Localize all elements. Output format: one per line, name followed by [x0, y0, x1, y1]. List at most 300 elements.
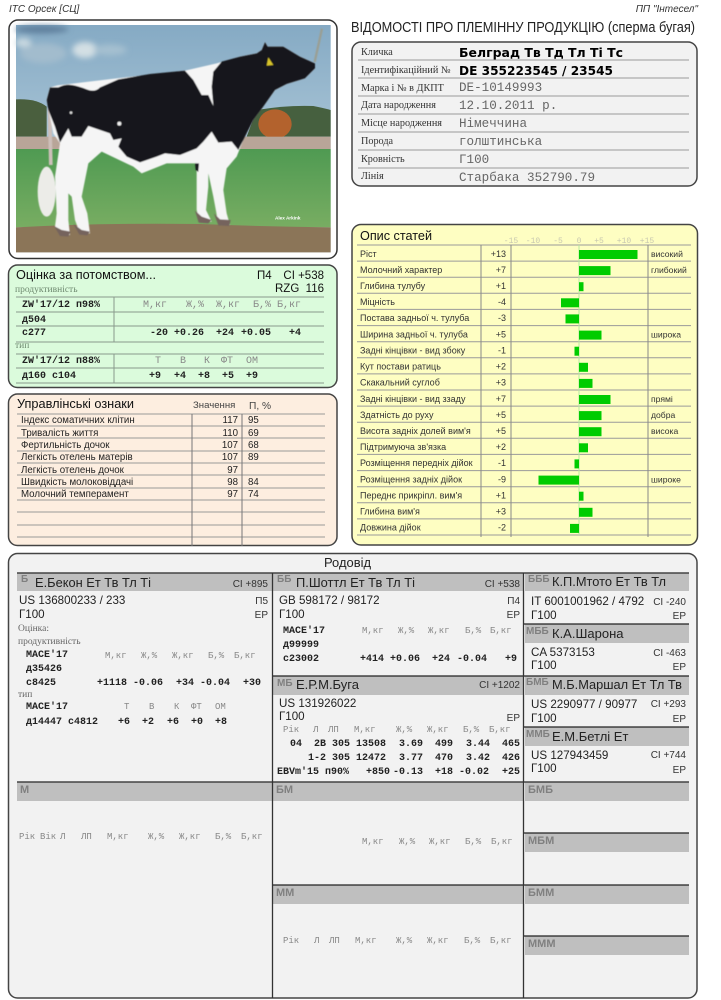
sire Б: ОМ [215, 702, 226, 712]
sire Б: +6 [118, 717, 130, 728]
ancestor ММБ: US 127943459 [531, 749, 608, 762]
ancestor ММБ [526, 729, 686, 776]
sire Б: Ж,кг [172, 651, 194, 661]
photographer credit: Alex Arkink [275, 215, 301, 220]
type table: +8 [198, 371, 210, 382]
sire Б: +8 [215, 717, 227, 728]
production table: Ж,% [186, 300, 204, 311]
granddam МБ: Г100 [279, 710, 305, 723]
traits table: 107 [222, 452, 238, 463]
ancestor МББ: МББ [526, 626, 549, 637]
trait names: Задні кінцівки - вид збоку [360, 346, 466, 356]
ancestor БББ [528, 574, 686, 622]
ancestor БМБ: М.Б.Маршал Ет Тл Тв [552, 677, 682, 692]
trait values: +5 [496, 426, 506, 436]
type table: ФТ [221, 356, 233, 367]
sire Б: д14447 с4812 [26, 717, 98, 728]
index values: CI +538 [283, 270, 324, 282]
ancestor МББ: ЕР [673, 662, 686, 673]
row: breed: голштинська [459, 135, 543, 149]
row: id number [361, 64, 613, 78]
ancestor ММ: ММ [276, 887, 294, 899]
sire Б: +6 [167, 717, 179, 728]
ancestor ММ: Рік [283, 936, 299, 946]
traits table: Індекс соматичних клітин [21, 415, 135, 426]
sire Б: -0.04 [200, 678, 230, 689]
ancestor МБМ empty: МБМ [528, 835, 554, 847]
granddam МБ: Рік [283, 725, 299, 735]
trait names: Підтримуюча зв'язка [360, 442, 446, 452]
trait names: Розміщення задніх дійок [360, 474, 462, 484]
granddam МБ: Ж,% [396, 725, 413, 735]
granddam МБ: Б,% [463, 725, 480, 735]
ancestor МББ: Г100 [531, 659, 557, 672]
granddam МБ: 04 [290, 739, 302, 750]
type table: +4 [174, 371, 186, 382]
granddam МБ: 3.69 [399, 739, 423, 750]
production table: Б,% [253, 300, 271, 311]
grandsire ББ: д99999 [283, 640, 319, 651]
traits table: Легкість отелень матерів [21, 452, 133, 463]
ancestor МББ: К.А.Шарона [552, 626, 624, 641]
trait names: Довжина дійок [360, 522, 421, 532]
column headers: Значення [193, 400, 235, 411]
granddam МБ: 499 [435, 739, 453, 750]
row: name: Белград Тв Тд Тл Ті Тс [459, 46, 623, 60]
sire Б: Б,% [208, 651, 225, 661]
panel: pedigree [8, 554, 697, 998]
ancestor БМ: Ж,кг [429, 837, 451, 847]
production table: +24 [216, 328, 234, 339]
granddam МБ: 3.42 [466, 753, 490, 764]
production table: д504 [22, 315, 46, 326]
granddam МБ: Е.Р.М.Буга [296, 677, 360, 692]
panel: identification data [352, 42, 697, 186]
trait values [491, 249, 506, 532]
column headers [193, 400, 271, 412]
trait values: -3 [498, 313, 506, 323]
trait names: Здатність до руху [360, 410, 434, 420]
granddam МБ: 12472 [356, 753, 386, 764]
trait values: -2 [498, 522, 506, 532]
sire Б: ФТ [191, 702, 202, 712]
trait names: Ріст [360, 249, 377, 259]
trait names: Молочний характер [360, 265, 442, 275]
production table: ZW'17/12 п98% [22, 299, 100, 311]
grandsire ББ: Б,% [465, 626, 482, 636]
traits table: 95 [248, 415, 259, 426]
panel: bull photo [9, 20, 337, 258]
sire Б: +34 [176, 678, 194, 689]
ancestor БММ empty: БММ [528, 887, 554, 899]
sire Б: -0.06 [133, 678, 163, 689]
column headers: П, % [249, 401, 271, 412]
row: line [361, 171, 595, 185]
sire Б: М,кг [105, 651, 127, 661]
type subheading: тип [15, 341, 29, 351]
ancestor ММ: Ж,кг [427, 936, 449, 946]
sire Б: П5 [255, 596, 268, 607]
grandsire ББ: ЕР [507, 610, 520, 621]
pedigree heading: Родовід [324, 555, 371, 570]
index values: RZG [275, 283, 299, 295]
ancestor БББ: БББ [528, 574, 550, 585]
ancestor БМ: Б,кг [491, 837, 513, 847]
granddam МБ: 13508 [356, 739, 386, 750]
grandsire ББ [277, 574, 520, 665]
heading: Оцінка за потомством... [16, 267, 156, 282]
grandsire ББ: MACE'17 [283, 625, 325, 637]
trait values: +13 [491, 249, 506, 259]
sire Б: продуктивність [18, 637, 81, 647]
trait names: Переднє прикріпл. вим'я [360, 490, 462, 500]
sire Б: ЕР [255, 610, 268, 621]
sire Б [18, 574, 268, 728]
traits table: Фертильність дочок [21, 440, 110, 451]
ancestor ММ: Л [313, 936, 319, 946]
type table: +5 [222, 371, 234, 382]
traits table: 117 [223, 415, 238, 426]
row: line: Лінія [361, 171, 384, 182]
traits table: Молочний темперамент [21, 489, 129, 500]
heading: Управлінські ознаки [17, 396, 134, 411]
row: id number: DE 355223545 / 23545 [459, 64, 613, 78]
trait names: Висота задніх долей вим'я [360, 426, 471, 436]
sire Б: MACE'17 [26, 649, 68, 661]
ancestor БББ: IT 6001001962 / 4792 [531, 595, 644, 608]
sire Б: тип [18, 690, 32, 700]
granddam МБ: М,кг [354, 725, 376, 735]
ancestor БМБ: CI +293 [651, 699, 686, 710]
sire Б: +30 [243, 678, 261, 689]
dam М: М,кг [107, 832, 129, 842]
trait values: +1 [496, 281, 506, 291]
row: blood: Г100 [459, 153, 489, 167]
ancestor МББ: CA 5373153 [531, 646, 595, 659]
dam М: Вік [40, 832, 56, 842]
traits table: 97 [227, 489, 238, 500]
granddam МБ: 3.77 [399, 753, 423, 764]
ancestor МББ: CI -463 [653, 648, 686, 659]
trait notes [651, 249, 687, 484]
sire Б: Б [21, 574, 28, 585]
sire Б: Ж,% [141, 651, 158, 661]
dam М: Ж,% [148, 832, 165, 842]
granddam МБ: 465 [502, 739, 520, 750]
type table: +9 [246, 371, 258, 382]
trait names: Глибина вим'я [360, 506, 420, 516]
header: left organisation: ІТС Орсек [СЦ] [9, 4, 80, 15]
grandsire ББ: Ж,кг [428, 626, 450, 636]
trait values: +7 [496, 265, 506, 275]
granddam МБ: CI +1202 [479, 680, 520, 691]
row: blood [361, 153, 489, 167]
ancestor ММ [276, 887, 512, 946]
granddam МБ: EBVm'15 п90% [277, 766, 349, 778]
type table: д160 с104 [22, 371, 76, 382]
row: line: Старбака 352790.79 [459, 171, 595, 185]
dam М: ЛП [80, 832, 92, 842]
production table [22, 299, 301, 339]
trait values: +2 [496, 362, 506, 372]
row: birth date [361, 99, 557, 113]
trait values: +3 [496, 506, 506, 516]
type table [22, 355, 258, 382]
trait names: Кут постави ратиць [360, 362, 441, 372]
production table: Ж,кг [216, 300, 240, 311]
type table: Т [155, 356, 161, 367]
traits table: 69 [248, 428, 259, 439]
ancestor БМ: БМ [276, 784, 293, 796]
bar chart [538, 250, 638, 533]
sire Б: В [149, 702, 155, 712]
trait notes: прямі [651, 394, 673, 404]
ancestor БМ: Ж,% [399, 837, 416, 847]
row: blood: Кровність [361, 154, 405, 165]
index values [257, 270, 324, 295]
row: breed [361, 135, 543, 149]
ancestor БМБ: ЕР [673, 714, 686, 725]
heading: Опис статей [360, 228, 432, 243]
traits table: 84 [248, 477, 259, 488]
grandsire ББ: -0.04 [457, 654, 487, 665]
ancestor ММБ: CI +744 [651, 750, 686, 761]
trait names: Глибина тулубу [360, 281, 426, 291]
sire Б: +1118 [97, 678, 127, 689]
trait names: Міцність [360, 297, 395, 307]
trait notes: високий [651, 249, 683, 259]
grandsire ББ: +24 [432, 654, 450, 665]
ancestor ММБ: ММБ [526, 729, 550, 740]
ancestor ММБ: Г100 [531, 762, 557, 775]
traits table: 97 [227, 465, 238, 476]
type table: ZW'17/12 п88% [22, 355, 100, 367]
panel: progeny evaluation [8, 265, 337, 388]
traits table: Швидкість молоковіддачі [21, 477, 133, 488]
ancestor БМБ [526, 677, 686, 725]
granddam МБ: ЕР [507, 713, 520, 724]
grandsire ББ: +9 [505, 654, 517, 665]
grandsire ББ: GB 598172 / 98172 [279, 594, 380, 607]
type table: К [204, 356, 210, 367]
grandsire ББ: с23002 [283, 654, 319, 665]
granddam МБ: 2В [314, 739, 326, 750]
ancestor ММ: Ж,% [396, 936, 413, 946]
row: mark [361, 81, 542, 95]
granddam МБ: 1-2 [308, 753, 326, 764]
traits table: Тривалість життя [21, 428, 98, 439]
granddam МБ: ЛП [327, 725, 339, 735]
header: right organisation: ПП "Інтесел" [636, 4, 698, 15]
dam М: Ж,кг [179, 832, 201, 842]
trait values: +7 [496, 394, 506, 404]
granddam МБ: US 131926022 [279, 697, 356, 710]
grandsire ББ: П4 [507, 596, 520, 607]
axis scale: +5 [594, 237, 604, 246]
grandsire ББ: Б,кг [490, 626, 512, 636]
traits table: 107 [222, 440, 238, 451]
row: name: Кличка [361, 47, 393, 58]
trait notes: добра [651, 410, 675, 420]
bull body [38, 29, 322, 237]
row: name [361, 46, 623, 60]
trait values: -9 [498, 474, 506, 484]
granddam МБ: Л [312, 725, 318, 735]
panel: management traits [8, 394, 337, 546]
row: birth place: Місце народження [361, 118, 442, 129]
ancestor ММБ: Е.М.Бетлі Ет [552, 729, 628, 744]
row: mark: DE-10149993 [459, 81, 542, 95]
dam М: Л [59, 832, 65, 842]
traits table: 89 [248, 452, 259, 463]
ancestor ММ: Б,% [464, 936, 481, 946]
ancestor БМ [276, 784, 513, 847]
granddam МБ: +18 [435, 767, 453, 778]
trait notes: висока [651, 426, 678, 436]
ancestor БББ: Г100 [531, 609, 557, 622]
sire Б: US 136800233 / 233 [19, 594, 125, 607]
ancestor БМБ: БМБ [526, 677, 549, 688]
row: breed: Порода [361, 136, 394, 147]
sire Б: MACE'17 [26, 701, 68, 713]
traits table: Легкість отелень дочок [21, 465, 125, 476]
trait values: +5 [496, 330, 506, 340]
pedigree header bars [17, 573, 689, 955]
grandsire ББ: М,кг [362, 626, 384, 636]
axis scale [504, 237, 654, 246]
axis scale: -15 [504, 237, 518, 246]
row: birth place: Німеччина [459, 117, 527, 131]
production table: +0.05 [241, 328, 271, 339]
trait names [360, 249, 473, 532]
dam М: Рік [19, 832, 35, 842]
production table: Б,кг [277, 300, 301, 311]
ancestor БМ: Б,% [465, 837, 482, 847]
granddam МБ [277, 677, 520, 778]
trait notes: широке [651, 474, 681, 484]
row: birth date: 12.10.2011 р. [459, 99, 557, 113]
sire Б: Т [124, 702, 130, 712]
row: birth date: Дата народження [361, 100, 436, 111]
sire Б: Е.Бекон Ет Тв Тл Ті [35, 575, 151, 590]
dam М: М [20, 784, 29, 796]
trait values: -4 [498, 297, 506, 307]
dam М: Б,% [215, 832, 232, 842]
traits table: 98 [227, 477, 238, 488]
granddam МБ: Ж,кг [427, 725, 449, 735]
dam М [19, 784, 263, 842]
ancestor ММ: М,кг [355, 936, 377, 946]
photo of the bull [15, 25, 331, 252]
sire Б: +2 [142, 717, 154, 728]
axis scale: -10 [526, 237, 540, 246]
granddam МБ: 305 [332, 753, 350, 764]
trait names: Скакальний суглоб [360, 378, 440, 388]
axis scale: 0 [577, 237, 582, 246]
type table: ОМ [246, 356, 258, 367]
trait names: Постава задньої ч. тулуба [360, 313, 469, 323]
sire Б: Оцінка: [18, 624, 49, 634]
sire Б: д35426 [26, 664, 62, 675]
granddam МБ: МБ [277, 678, 293, 689]
trait notes: глибокий [651, 265, 687, 275]
grandsire ББ: CI +538 [485, 579, 520, 590]
ancestor ММ: Б,кг [490, 936, 512, 946]
trait values: +3 [496, 378, 506, 388]
trait notes: широка [651, 330, 681, 340]
sire Б: с8425 [26, 678, 56, 689]
ancestor БББ: ЕР [673, 611, 686, 622]
row: id number: Ідентифікаційний № [361, 65, 451, 76]
ancestor БМ: М,кг [362, 837, 384, 847]
trait values: -1 [498, 458, 506, 468]
granddam МБ: 305 [332, 739, 350, 750]
traits table [21, 415, 259, 500]
granddam МБ: -0.13 [393, 767, 423, 778]
dam М: Б,кг [241, 832, 263, 842]
production table: М,кг [143, 300, 167, 311]
axis scale: -5 [553, 237, 563, 246]
trait values: -1 [498, 346, 506, 356]
trait values: +1 [496, 490, 506, 500]
ancestor МББ [526, 626, 686, 673]
production table: с277 [22, 328, 46, 339]
ancestor БМБ: US 2290977 / 90977 [531, 698, 637, 711]
traits table: 110 [223, 428, 239, 439]
sire Б: CI +895 [233, 579, 268, 590]
trait values: +2 [496, 442, 506, 452]
index values: 116 [306, 283, 324, 295]
panel: linear type traits [352, 224, 698, 545]
sire Б: Б,кг [234, 651, 256, 661]
row: mark: Марка і № в ДКПТ [361, 83, 445, 94]
grandsire ББ: +0.06 [390, 654, 420, 665]
production table: +0.26 [174, 328, 204, 339]
ancestor ММБ: ЕР [673, 765, 686, 776]
granddam МБ: 426 [502, 753, 520, 764]
granddam МБ: -0.02 [459, 767, 489, 778]
traits table: 68 [248, 440, 259, 451]
type table: В [180, 356, 186, 367]
sire Б: К [174, 702, 180, 712]
granddam МБ: 3.44 [466, 739, 490, 750]
ancestor МММ empty: МММ [528, 938, 556, 950]
grandsire ББ: П.Шоттл Ет Тв Тл Ті [296, 575, 415, 590]
sire Б: Г100 [19, 608, 45, 621]
ancestor БББ: К.П.Мтото Ет Тв Тл [552, 574, 666, 589]
ancestor БББ: CI -240 [653, 597, 686, 608]
traits table: 74 [248, 489, 259, 500]
row: birth place [361, 117, 527, 131]
grandsire ББ: Г100 [279, 608, 305, 621]
production table: +4 [289, 328, 301, 339]
axis scale: +15 [640, 237, 654, 246]
trait names: Розміщення передніх дійок [360, 458, 473, 468]
grandsire ББ: ББ [277, 574, 291, 585]
sire Б: +0 [191, 717, 203, 728]
axis scale: +10 [617, 237, 631, 246]
ancestor БМБ: Г100 [531, 712, 557, 725]
trait values: +5 [496, 410, 506, 420]
granddam МБ: Б,кг [489, 725, 511, 735]
grandsire ББ: +414 [360, 654, 384, 665]
index values: П4 [257, 270, 272, 282]
granddam МБ: 470 [435, 753, 453, 764]
production subheading: продуктивність [15, 285, 78, 295]
ancestor БМБ empty: БМБ [528, 784, 553, 796]
grandsire ББ: Ж,% [398, 626, 415, 636]
trait names: Задні кінцівки - вид ззаду [360, 394, 466, 404]
